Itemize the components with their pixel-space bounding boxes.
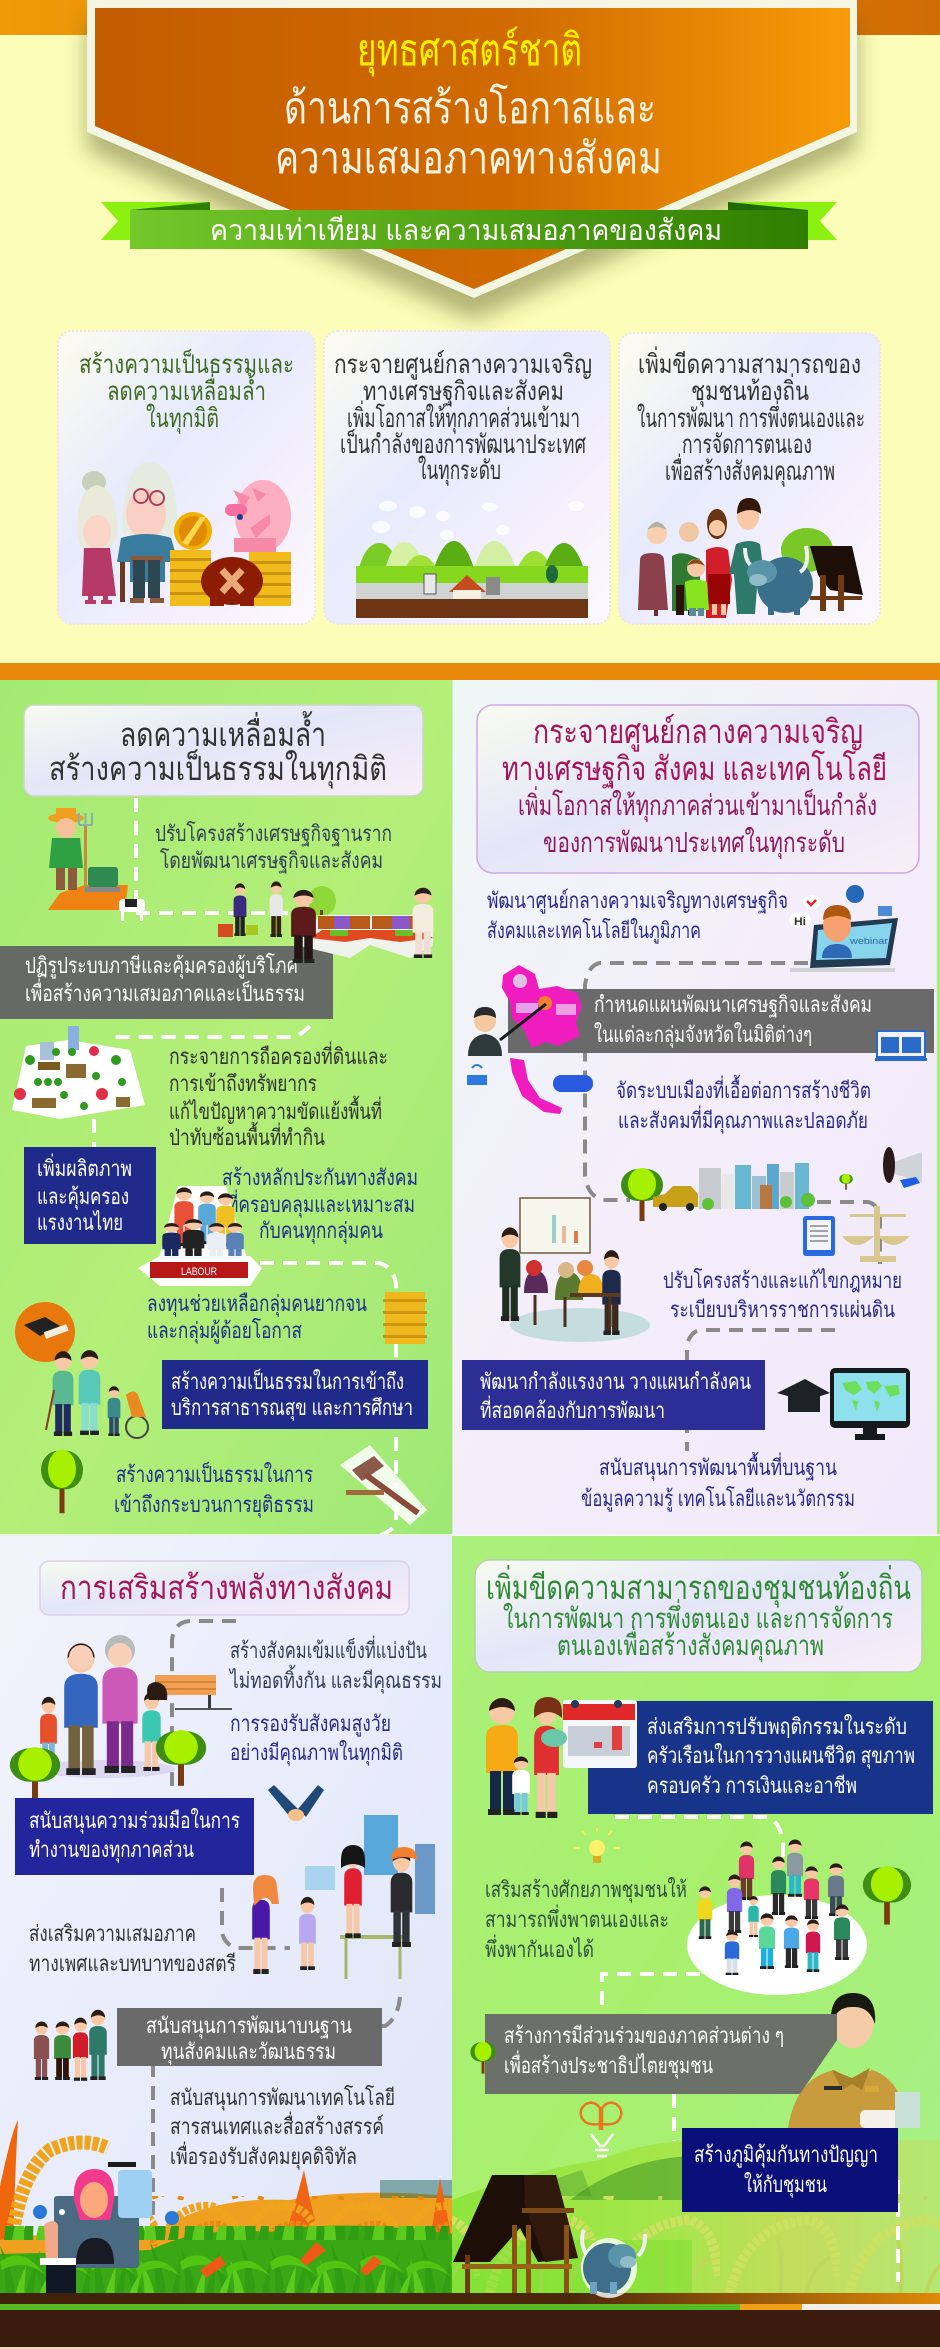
icon: webinar laptop: Hi xyxy=(794,916,806,928)
blue box: workforce xyxy=(462,1360,765,1430)
blue box: cooperation: สนับสนุนความร่วมมือในการ xyxy=(29,1808,240,1834)
icon: thatched hut xyxy=(781,528,863,611)
icon: gavel xyxy=(340,1445,427,1525)
text: ageing society: อย่างมีคุณภาพในทุกมิติ xyxy=(230,1740,403,1766)
text: social protection xyxy=(222,1165,418,1244)
icon: game controller xyxy=(553,1075,593,1092)
rice field left xyxy=(0,2120,452,2296)
text: justice access xyxy=(114,1460,314,1518)
text: strong society xyxy=(228,1635,442,1694)
icon: video call on phone xyxy=(33,2162,179,2294)
title: line three: ความเสมอภาคทางสังคม xyxy=(275,134,662,183)
text: community potential: สามารถพึ่งพาตนเองและ xyxy=(485,1904,669,1932)
gray box: tax reform: เพื่อสร้างความเสมอภาคและเป็นธรรม xyxy=(25,978,305,1006)
icon: tree xyxy=(863,1866,911,1925)
text: restructure grassroots economy xyxy=(155,821,392,874)
icon: grandparents and grandchildren xyxy=(35,1635,175,1778)
text: digital technology: เพื่อรองรับสังคมยุคดิจิทัล xyxy=(170,2141,357,2170)
icon: meeting group xyxy=(500,1198,650,1342)
icon: family xyxy=(638,498,764,618)
ground strip xyxy=(0,2293,940,2349)
icon: tablet xyxy=(803,1216,835,1256)
icon: small tree xyxy=(470,2042,496,2074)
card heading: เพิ่มขีดความสามารถของ xyxy=(638,346,861,379)
navy box: intellectual immunity xyxy=(682,2128,898,2212)
icon: brain bulb xyxy=(581,2103,621,2156)
card heading: สร้างความเป็นธรรมและ xyxy=(79,348,294,379)
gray box: provincial plans: กำหนดแผนพัฒนาเศรษฐกิจและสังคม xyxy=(594,992,872,1018)
gray box: provincial plans: ในแต่ละกลุ่มจังหวัดในมิติต่างๆ xyxy=(594,1022,812,1048)
text: community potential: เสริมสร้างศักยภาพชุมชนให้ xyxy=(485,1877,687,1903)
text: regional growth centres: พัฒนาศูนย์กลางความเจริญทางเศรษฐกิจ xyxy=(487,888,788,914)
card heading: เพื่อสร้างสังคมคุณภาพ xyxy=(665,453,835,487)
card: community capacity xyxy=(619,333,880,624)
icon: bench xyxy=(155,1675,232,1710)
icon: city map xyxy=(12,1026,145,1119)
text: digital technology: สารสนเทศและสื่อสร้างสรรค์ xyxy=(170,2111,384,2139)
gray box: social capital: ทุนสังคมและวัฒนธรรม xyxy=(161,2039,336,2065)
card heading: เป็นกำลังของการพัฒนาประเทศ xyxy=(340,428,586,459)
top orange bar xyxy=(0,0,940,35)
panel heading: ลดความเหลื่อมล้ำ xyxy=(120,711,326,753)
icon: small family xyxy=(34,2010,107,2081)
text: gender equality: ทางเพศและบทบาทของสตรี xyxy=(29,1951,236,1976)
panel heading: กระจายศูนย์กลางความเจริญ xyxy=(533,713,863,752)
connector dashes xyxy=(585,963,880,1451)
text: invest in the poor: ลงทุนช่วยเหลือกลุ่มคนยากจน xyxy=(147,1291,367,1317)
icon: market scene xyxy=(218,881,433,963)
text: social protection: ที่ครอบคลุมและเหมาะสม xyxy=(227,1189,415,1218)
lower orange band xyxy=(0,663,940,680)
text: restructure grassroots economy: ปรับโครงสร้างเศรษฐกิจฐานราก xyxy=(155,821,392,847)
text: area development: สนับสนุนการพัฒนาพื้นที่บนฐาน xyxy=(599,1452,837,1481)
card heading: ในทุกมิติ xyxy=(146,403,219,434)
icon: disabled people and nurse xyxy=(46,1350,148,1438)
icon: laptop screen xyxy=(875,1031,927,1061)
card heading: เพิ่มโอกาสให้ทุกภาคส่วนเข้ามา xyxy=(347,400,580,434)
icon: tree left xyxy=(10,1747,60,1803)
blue box: labour productivity: แรงงานไทย xyxy=(37,1210,123,1235)
text: land distribution: การเข้าถึงทรัพยากร xyxy=(169,1071,317,1096)
connector dashes xyxy=(153,1621,400,2282)
text: liveable cities xyxy=(616,1075,871,1134)
card heading: ทางเศรษฐกิจและสังคม xyxy=(363,376,564,407)
icon: megaphone xyxy=(883,1147,922,1188)
gray box: participation: เพื่อสร้างประชาธิปไตยชุมชน xyxy=(504,2050,713,2079)
icon: elderly couple xyxy=(77,462,178,604)
panel heading: ของการพัฒนาประเทศในทุกระดับ xyxy=(543,826,845,860)
text: digital technology xyxy=(170,2085,395,2170)
text: strong society: สร้างสังคมเข้มแข็งที่แบ่งปัน xyxy=(230,1635,427,1663)
panel heading: ตนเองเพื่อสร้างสังคมคุณภาพ xyxy=(557,1626,824,1663)
text: land distribution: กระจายการถือครองที่ดินและ xyxy=(169,1041,388,1069)
icon: world monitor xyxy=(830,1368,910,1440)
text: liveable cities: จัดระบบเมืองที่เอื้อต่อการสร้างชีวิต xyxy=(616,1075,871,1103)
blue box: labour productivity xyxy=(24,1147,156,1244)
text: regional growth centres: สังคมและเทคโนโลยีในภูมิภาค xyxy=(487,918,701,944)
icon: coin stack xyxy=(383,1292,427,1344)
text: land distribution: ป่าทับซ้อนพื้นที่ทำกิน xyxy=(169,1122,325,1150)
text: justice access: เข้าถึงกระบวนการยุติธรรม xyxy=(114,1492,314,1518)
icon: farmer xyxy=(48,808,128,910)
connector dashes xyxy=(94,798,396,1535)
title: strategy name: ยุทธศาสตร์ชาติ xyxy=(357,26,582,77)
icon: tree right xyxy=(156,1730,206,1786)
icon: piggy bank xyxy=(225,480,291,552)
icon: handshake xyxy=(268,1785,324,1821)
gray box: social capital: สนับสนุนการพัฒนาบนฐาน xyxy=(146,2013,352,2039)
text: social protection: กับคนทุกกลุ่มคน xyxy=(259,1218,383,1244)
icon: coin stacks xyxy=(170,550,291,606)
panel: local community capacity xyxy=(452,1534,940,2296)
blue box: workforce: พัฒนากำลังแรงงาน วางแผนกำลังคน xyxy=(480,1369,751,1394)
panel heading xyxy=(40,1561,409,1615)
text: justice access: สร้างความเป็นธรรมในการ xyxy=(116,1460,313,1487)
illustration: clouds xyxy=(372,501,584,540)
icon: light bulb xyxy=(574,1828,620,1863)
icon: office scene xyxy=(252,1815,435,1979)
header banner xyxy=(87,0,857,320)
blue box: workforce: ที่สอดคล้องกับการพัฒนา xyxy=(480,1395,665,1423)
gray box: provincial plans xyxy=(508,989,934,1053)
blue box: household behaviour xyxy=(588,1701,933,1814)
icon: webinar laptop: webinar xyxy=(849,936,888,946)
card heading xyxy=(637,346,865,487)
text: ageing society xyxy=(230,1711,403,1766)
text: invest in the poor xyxy=(147,1291,367,1344)
blue box: cooperation xyxy=(15,1798,254,1875)
navy box: intellectual immunity: ให้กับชุมชน xyxy=(744,2172,827,2198)
text: community potential xyxy=(485,1877,687,1962)
text: gender equality: ส่งเสริมความเสมอภาค xyxy=(29,1921,196,1946)
gray box: tax reform: ปฏิรูประบบภาษีและคุ้มครองผู้บริโภค xyxy=(25,953,298,979)
icon: broken piggy bank xyxy=(201,557,263,606)
panel: reduce inequality xyxy=(0,680,454,1536)
green ribbon xyxy=(101,202,837,249)
icon: graduation badge xyxy=(15,1302,75,1362)
icon: labour group xyxy=(138,1186,262,1286)
icon: wifi router xyxy=(467,1065,487,1085)
icon: water buffalo xyxy=(581,2230,645,2298)
ribbon text: ความเท่าเทียม และความเสมอภาคของสังคม xyxy=(210,215,722,247)
card heading: ลดความเหลื่อมล้ำ xyxy=(107,372,266,406)
blue box: labour productivity: และคุ้มครอง xyxy=(37,1184,129,1210)
panel heading xyxy=(477,705,919,873)
text: strong society: ไม่ทอดทิ้งกัน และมีคุณธรรม xyxy=(228,1665,442,1694)
text: regional growth centres xyxy=(487,888,788,944)
blue box: equal access xyxy=(162,1360,428,1429)
icon: webinar laptop xyxy=(789,885,898,972)
panel: distribute growth centres xyxy=(453,680,940,1536)
icon: graduation cap xyxy=(777,1379,830,1412)
icon: scales of justice xyxy=(842,1206,910,1262)
text: invest in the poor: และกลุ่มผู้ด้อยโอกาส xyxy=(147,1318,302,1344)
icon: tree xyxy=(41,1450,83,1513)
icon: cow xyxy=(119,899,145,921)
icon: presenter xyxy=(468,1004,546,1056)
icon: family with baby xyxy=(486,1697,567,1818)
panel heading: สร้างความเป็นธรรมในทุกมิติ xyxy=(49,749,387,789)
icon: thatched hut xyxy=(453,2175,578,2295)
card heading: ชุมชนท้องถิ่น xyxy=(691,373,809,407)
field background right xyxy=(452,2140,940,2296)
blue box: equal access: สร้างความเป็นธรรมในการเข้าถึง xyxy=(171,1367,404,1394)
text: community potential: พึ่งพากันเองได้ xyxy=(485,1934,594,1962)
text: land distribution xyxy=(169,1041,388,1150)
gray box: participation: สร้างการมีส่วนร่วมของภาคส่วนต่าง ๆ xyxy=(504,2023,784,2048)
text: area development: ข้อมูลความรู้ เทคโนโลยีและนวัตกรรม xyxy=(581,1486,855,1512)
card: distribute growth xyxy=(324,331,610,624)
card heading xyxy=(334,349,592,486)
panel heading xyxy=(475,1560,922,1672)
text: social protection: สร้างหลักประกันทางสังคม xyxy=(222,1165,418,1190)
text: gender equality xyxy=(29,1921,236,1976)
icon: government officer xyxy=(788,1993,920,2128)
icon: labour group: LABOUR xyxy=(181,1266,217,1278)
text: liveable cities: และสังคมที่มีคุณภาพและปลอดภัย xyxy=(618,1105,868,1134)
card heading xyxy=(79,348,294,434)
icon: calendar xyxy=(563,1700,637,1768)
card: reduce inequality xyxy=(58,331,315,624)
gray box: tax reform xyxy=(0,946,333,1019)
blue box: equal access: บริการสาธารณสุข และการศึกษา xyxy=(171,1395,413,1421)
blue box: household behaviour: ครอบครัว การเงินและอาชีพ xyxy=(647,1773,857,1798)
gray box: participation xyxy=(485,2014,837,2094)
gray box: social capital xyxy=(117,2008,382,2066)
text: digital technology: สนับสนุนการพัฒนาเทคโนโลยี xyxy=(170,2085,395,2111)
panel: social empowerment xyxy=(0,1534,452,2296)
connector dashes xyxy=(602,1817,783,2141)
text: ageing society: การรองรับสังคมสูงวัย xyxy=(230,1711,391,1737)
icon: gold coin xyxy=(174,512,212,550)
icon: map of thailand xyxy=(502,965,582,1114)
icon: tree, car and city xyxy=(621,1163,815,1221)
card heading: กระจายศูนย์กลางความเจริญ xyxy=(334,349,592,380)
text: law reform xyxy=(663,1268,902,1322)
card heading: การจัดการตนเอง xyxy=(682,429,812,459)
title: line two: ด้านการสร้างโอกาสและ xyxy=(284,83,656,133)
navy box: intellectual immunity: สร้างภูมิคุ้มกันทางปัญญา xyxy=(694,2142,878,2168)
panel heading xyxy=(24,705,423,796)
card heading: ในทุกระดับ xyxy=(418,455,501,486)
text: land distribution: แก้ไขปัญหาความขัดแย้งพื้นที่ xyxy=(169,1096,382,1124)
text: area development xyxy=(581,1452,855,1512)
blue box: cooperation: ทำงานของทุกภาคส่วน xyxy=(29,1837,194,1863)
illustration: landscape xyxy=(356,541,588,618)
text: restructure grassroots economy: โดยพัฒนาเศรษฐกิจและสังคม xyxy=(160,848,383,874)
blue box: labour productivity: เพิ่มผลิตภาพ xyxy=(37,1153,132,1181)
icon: community crowd xyxy=(687,1839,867,1995)
icon: small tree xyxy=(839,1174,853,1190)
panel heading: การเสริมสร้างพลังทางสังคม xyxy=(60,1569,393,1606)
icon: water buffalo xyxy=(745,546,813,615)
